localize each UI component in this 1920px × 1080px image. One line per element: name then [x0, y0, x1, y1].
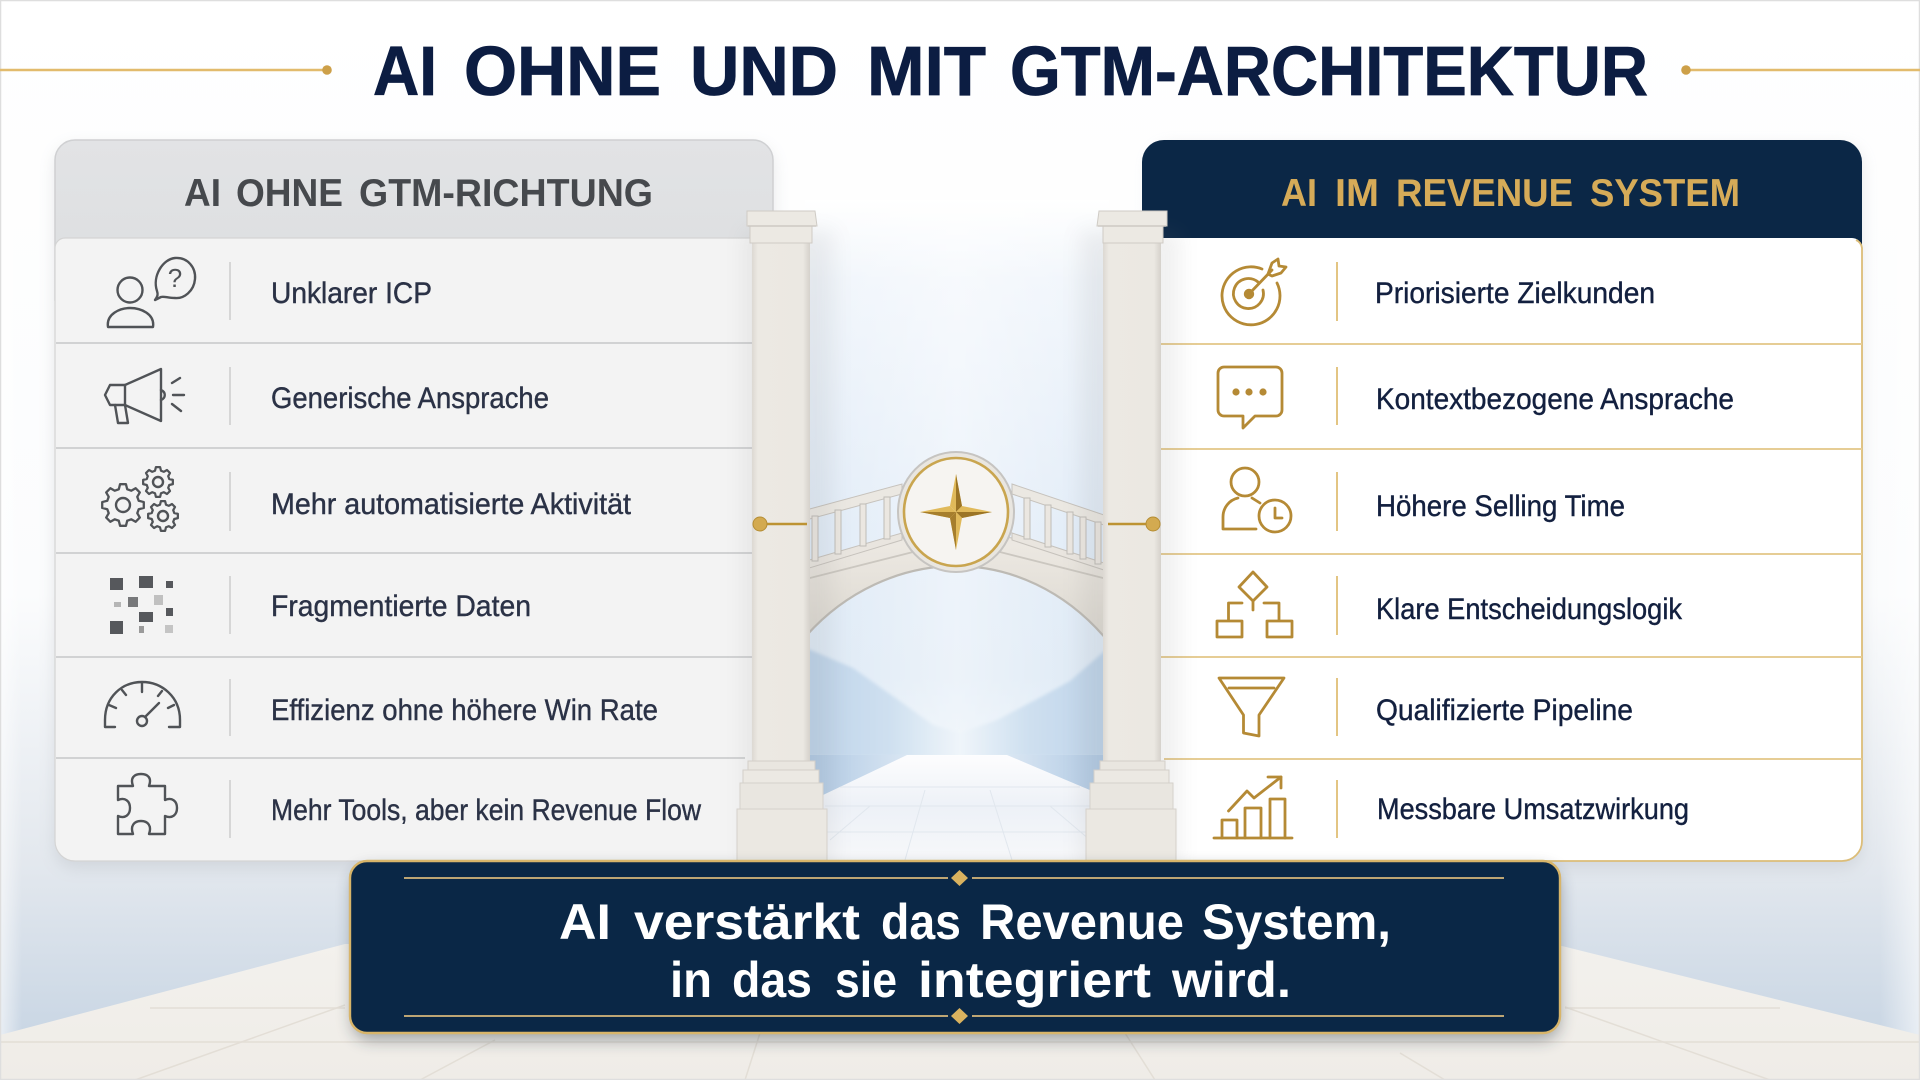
- panel body: [55, 238, 760, 861]
- label: Priorisierte Zielkunden: [1375, 277, 1655, 310]
- panel header: IM: [1335, 172, 1379, 215]
- right pillar: [1080, 211, 1180, 870]
- heading: AI: [373, 32, 437, 110]
- panel header: OHNE: [236, 172, 343, 215]
- panel: AI im Revenue System: [1142, 140, 1862, 868]
- label: Messbare Umsatzwirkung: [1377, 793, 1689, 826]
- heading: UND: [690, 32, 838, 110]
- icon: person with clock: [1223, 468, 1291, 532]
- row: Messbare Umsatzwirkung: [1214, 777, 1689, 838]
- label: Generische Ansprache: [271, 382, 549, 415]
- row: Fragmentierte Daten: [110, 576, 531, 634]
- icon: data fragments: [110, 576, 173, 634]
- row: Effizienz ohne höhere Win Rate: [105, 682, 658, 727]
- panel header: [1142, 140, 1862, 300]
- icon: target with arrow: [1222, 259, 1286, 325]
- connector dot left: [753, 517, 807, 531]
- icon: puzzle piece: [118, 774, 177, 834]
- row: Generische Ansprache: [105, 369, 549, 423]
- panel header: [55, 140, 773, 300]
- row: Mehr automatisierte Aktivität: [102, 467, 632, 531]
- top ornament: [404, 870, 1504, 886]
- bottom ornament: [404, 1008, 1504, 1024]
- icon: gauge: [105, 682, 180, 727]
- panel header: GTM-RICHTUNG: [359, 172, 653, 215]
- panel header: AI: [184, 172, 221, 215]
- message text: AI: [559, 894, 611, 950]
- row: Unklarer ICP: [108, 258, 432, 327]
- label: Mehr automatisierte Aktivität: [271, 488, 632, 521]
- icon: funnel: [1219, 678, 1284, 736]
- icon: chat bubble: [1218, 367, 1282, 428]
- message text: das: [732, 952, 812, 1008]
- icon: megaphone: [105, 369, 184, 423]
- left pillar: [737, 211, 834, 870]
- message text: sie: [835, 952, 897, 1008]
- message text: Revenue: [980, 894, 1184, 950]
- panel header: AI: [1281, 172, 1317, 215]
- row: Höhere Selling Time: [1223, 468, 1625, 532]
- decorative line left: [0, 65, 332, 75]
- heading: GTM-ARCHITEKTUR: [1010, 32, 1648, 110]
- icon: decision tree: [1217, 572, 1292, 637]
- title: [0, 32, 1920, 110]
- bridge with railing and medallion: [806, 452, 1107, 640]
- label: Kontextbezogene Ansprache: [1376, 383, 1734, 416]
- connector dot right: [1108, 517, 1160, 531]
- message text: wird.: [1171, 952, 1291, 1008]
- message text: System,: [1202, 894, 1391, 950]
- icon: gears: [102, 467, 178, 531]
- row: Priorisierte Zielkunden: [1222, 259, 1655, 325]
- scene: sky, mountains and path between the pillars: [805, 200, 1109, 862]
- message text: verstärkt: [634, 894, 860, 950]
- railing: [806, 484, 1107, 571]
- panel: AI ohne GTM-Richtung: [55, 140, 773, 868]
- label: Höhere Selling Time: [1376, 490, 1625, 523]
- heading: OHNE: [464, 32, 661, 110]
- panel header: SYSTEM: [1590, 172, 1740, 215]
- label: Effizienz ohne höhere Win Rate: [271, 694, 658, 727]
- label: Fragmentierte Daten: [271, 590, 531, 623]
- icon: person with question: ?: [168, 263, 182, 293]
- arch: [806, 533, 1107, 640]
- label: Unklarer ICP: [271, 277, 432, 310]
- heading: [373, 32, 1648, 110]
- message text: das: [881, 894, 961, 950]
- label: Qualifizierte Pipeline: [1376, 694, 1633, 727]
- row: Kontextbezogene Ansprache: [1218, 367, 1734, 428]
- banner: key message: [350, 861, 1560, 1040]
- panel body: [1150, 238, 1862, 861]
- label: Mehr Tools, aber kein Revenue Flow: [271, 794, 701, 827]
- heading: MIT: [867, 32, 986, 110]
- label: Klare Entscheidungslogik: [1376, 593, 1683, 626]
- message text: in: [670, 952, 712, 1008]
- row: Klare Entscheidungslogik: [1217, 572, 1683, 637]
- message text: [559, 894, 1391, 1008]
- panel header: REVENUE: [1396, 172, 1573, 215]
- row: Qualifizierte Pipeline: [1219, 678, 1633, 736]
- icon: growth chart: [1214, 777, 1292, 838]
- icon: person with question: [108, 258, 195, 327]
- message text: integriert: [918, 952, 1151, 1008]
- row: Mehr Tools, aber kein Revenue Flow: [118, 774, 701, 834]
- medallion with compass star: [898, 452, 1014, 572]
- decorative line right: [1681, 65, 1920, 75]
